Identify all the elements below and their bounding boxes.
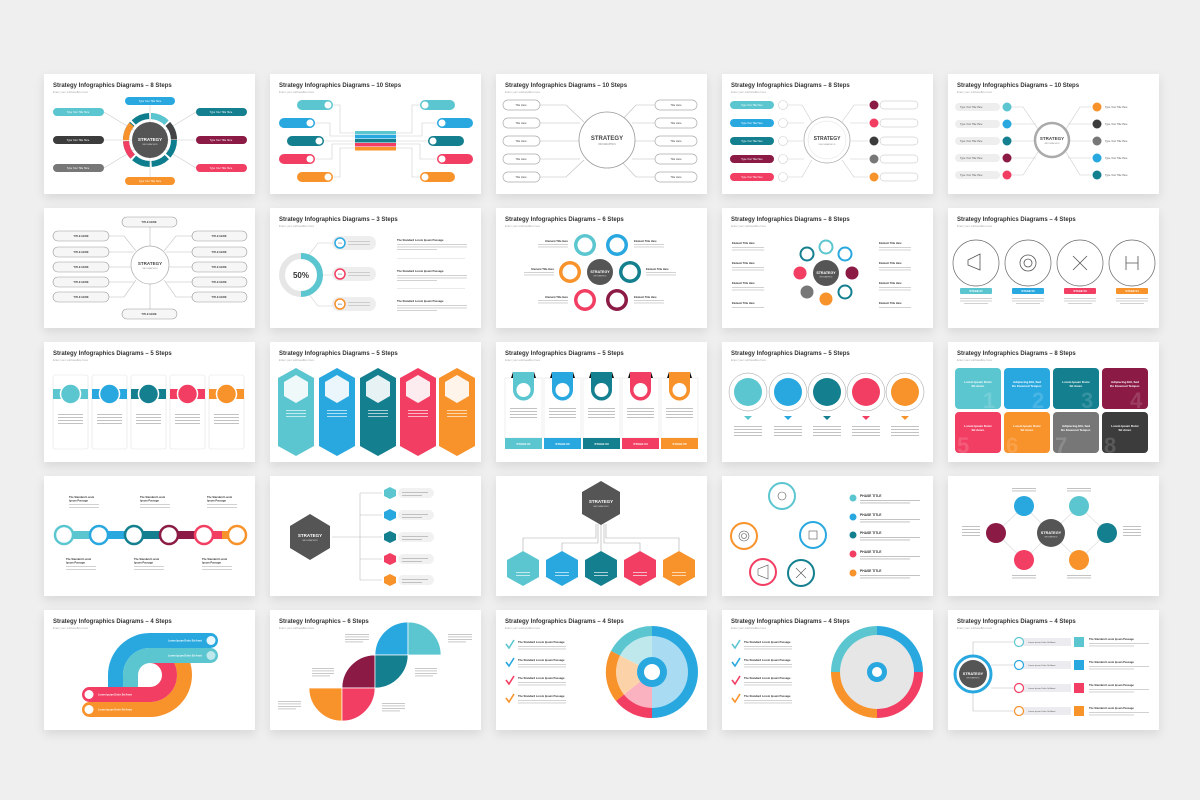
slide: 8 steps radial: INFOGRAPHICS: [142, 143, 158, 146]
slide: 5 steps hex columns: Enter your subheadline here: [279, 358, 315, 362]
slide: S-shape 6 steps: Strategy Infographics – 6 Steps: [279, 619, 369, 625]
slide: 4 steps stages: [948, 208, 1159, 328]
slide: 6 steps petals: [496, 208, 707, 328]
slide: hexagon list: [270, 476, 481, 596]
slide: donut 4 steps A: Enter your subheadline here: [505, 626, 541, 630]
slide: 3 steps 50%: 25%: [338, 274, 342, 276]
slide: 10 steps outline: Title Here: [670, 157, 682, 161]
slide: interlocking U 4 steps: Lorem Ipsum Dolor Sit Amet: [98, 708, 132, 712]
slide: donut 4 steps B: Enter your subheadline here: [731, 626, 767, 630]
slide: title here boxes: TITLE HERE: [73, 234, 89, 238]
slide: 8 steps ring: Element Title Here: [879, 241, 902, 245]
slide: 6 steps petals: Element Title Here: [545, 295, 569, 299]
slide: 6 steps petals: STRATEGY: [590, 270, 610, 274]
slide: 8 steps tiles: Do Eiusmod Tempor.: [1061, 428, 1091, 432]
slide: 8 steps radial: Type Your Title Here: [67, 167, 90, 170]
slide: cross circles: [948, 476, 1159, 596]
slide: 6 steps petals: Element Title Here: [545, 239, 569, 243]
slide: interlocking U 4 steps: [44, 610, 255, 730]
slide: 6 steps petals: Strategy Infographics Diagrams – 6 Steps: [505, 217, 624, 223]
slide: 5 steps stage cards: STAGE 04: [633, 442, 648, 446]
slide: 10 steps icons: Type Your Title Here: [1105, 174, 1128, 177]
slide: 3 steps 50%: The Standard Lorem Ipsum Passage: [397, 269, 444, 273]
slide: 8 steps radial: STRATEGY: [138, 137, 162, 142]
slide: 3 steps 50%: 65%: [338, 304, 342, 306]
slide: 10 steps outline: STRATEGY: [591, 136, 623, 142]
slide: 6 steps petals: Enter your subheadline here: [505, 224, 541, 228]
slide: 10 steps icons: Type Your Title Here: [960, 157, 983, 160]
slide: 8 steps ring: STRATEGY: [816, 271, 836, 275]
slide: list 4 steps: The Standard Lorem Ipsum Passage: [1089, 637, 1134, 641]
slide: 5 steps cards: Enter your subheadline here: [53, 358, 89, 362]
slide: 5 steps cards: Strategy Infographics Diagrams – 5 Steps: [53, 351, 172, 357]
slide: 10 steps icons: Type Your Title Here: [1105, 106, 1128, 109]
slide: title here boxes: [44, 208, 255, 328]
slide: hex tree: INFOGRAPHICS: [593, 505, 609, 508]
slide: 8 steps ring: Element Title Here: [879, 301, 902, 305]
slide: title here boxes: TITLE HERE: [73, 265, 89, 269]
slide: timeline: Ipsum Passage: [134, 560, 153, 564]
slide: timeline: The Standard Lorem: [202, 557, 228, 561]
slide: title here boxes: TITLE HERE: [211, 295, 227, 299]
slide: hexagon list: STRATEGY: [298, 533, 322, 538]
slide: 6 steps petals: Element Title Here: [634, 295, 657, 299]
slide: 3 steps 50%: [270, 208, 481, 328]
slide: interlocking U 4 steps: Lorem Ipsum Dolor Sit Amet: [98, 694, 132, 696]
slide: 8 steps colored pills: Strategy Infographics Diagrams – 8 Steps: [731, 83, 850, 89]
slide: donut 4 steps A: [496, 610, 707, 730]
slide: 8 steps tiles: Lorem Ipsum Dolor: [964, 424, 993, 428]
slide: 8 steps radial: Type Your Title Here: [210, 139, 233, 142]
slide: 8 steps colored pills: Type Your Title Here: [741, 104, 763, 107]
slide: 10 steps outline: Title Here: [670, 103, 682, 107]
slide: 10 steps outline: Title Here: [515, 103, 527, 107]
slide: 10 steps bars: Strategy Infographics Diagrams – 10 Steps: [279, 83, 402, 89]
slide: 5 steps cards: [44, 342, 255, 462]
slide: timeline: Ipsum Passage: [207, 498, 226, 502]
slide: 4 steps stages: STAGE 02: [1021, 289, 1035, 293]
slide: 8 steps radial: Enter your subheadline here: [53, 90, 89, 94]
slide: 8 steps radial: [44, 74, 255, 194]
slide: 3 steps 50%: 75%: [338, 243, 342, 245]
slide: donut 4 steps B: The Standard Lorem Ipsum Passage: [744, 658, 791, 662]
slide: 3 steps 50%: The Standard Lorem Ipsum Passage: [397, 299, 444, 303]
slide: 10 steps icons: INFOGRAPHICS: [1044, 142, 1060, 145]
slide: donut 4 steps A: The Standard Lorem Ipsum Passage: [518, 640, 565, 644]
slide: list 4 steps: Lorem Ipsum Dolor Sit Amet: [1028, 641, 1056, 644]
slide: donut 4 steps B: The Standard Lorem Ipsum Passage: [744, 694, 791, 698]
slide: 8 steps colored pills: [722, 74, 933, 194]
slide: 8 steps tiles: 2: [1032, 388, 1044, 413]
slide: 5 steps circles: [722, 342, 933, 462]
slide: 8 steps tiles: Do Eiusmod Tempor.: [1110, 384, 1140, 388]
slide: 10 steps icons: [948, 74, 1159, 194]
slide: title here boxes: TITLE HERE: [211, 250, 227, 254]
slide: title here boxes: TITLE HERE: [211, 234, 227, 238]
slide: 8 steps tiles: Adipiscing Elit, Sed: [1062, 424, 1090, 428]
slide: donut 4 steps B: Strategy Infographics Diagrams – 4 Steps: [731, 619, 850, 625]
slide: title here boxes: TITLE HERE: [141, 220, 157, 224]
slide: timeline: Ipsum Passage: [202, 560, 221, 564]
slide: 3 steps 50%: Strategy Infographics Diagrams – 3 Steps: [279, 217, 398, 223]
slide: 3 steps 50%: Enter your subheadline here: [279, 224, 315, 228]
slide: 10 steps outline: Title Here: [515, 139, 527, 143]
slide: 10 steps outline: Title Here: [515, 175, 527, 179]
slide: 8 steps tiles: Strategy Infographics Diagrams – 8 Steps: [957, 351, 1076, 357]
slide: 8 steps tiles: Sit Amet.: [1119, 428, 1132, 432]
slide: 10 steps outline: Title Here: [670, 139, 682, 143]
slide: 5 steps stage cards: [496, 342, 707, 462]
slide: donut 4 steps A: The Standard Lorem Ipsum Passage: [518, 694, 565, 698]
slide: 10 steps outline: Enter your subheadline here: [505, 90, 541, 94]
slide: title here boxes: TITLE HERE: [141, 312, 157, 316]
slide: list 4 steps: Lorem Ipsum Dolor Sit Amet: [1028, 687, 1056, 690]
slide: 8 steps ring: INFOGRAPHICS: [820, 276, 833, 278]
slide: title here boxes: TITLE HERE: [73, 295, 89, 299]
slide: 8 steps ring: Element Title Here: [732, 301, 755, 305]
slide: list 4 steps: Strategy Infographics Diagrams – 4 Steps: [957, 619, 1076, 625]
slide: timeline: The Standard Lorem: [140, 495, 166, 499]
slide: list 4 steps: Lorem Ipsum Dolor Sit Amet: [1028, 710, 1056, 713]
slide: 8 steps tiles: 3: [1081, 388, 1093, 413]
slide: 10 steps icons: Type Your Title Here: [1105, 140, 1128, 143]
slide: title here boxes: TITLE HERE: [73, 250, 89, 254]
slide: list 4 steps: The Standard Lorem Ipsum Passage: [1089, 683, 1134, 687]
slide: 8 steps colored pills: Type Your Title Here: [741, 158, 763, 161]
slide: 5 steps stage cards: Strategy Infographics Diagrams – 5 Steps: [505, 351, 624, 357]
slide: list 4 steps: The Standard Lorem Ipsum Passage: [1089, 706, 1134, 710]
slide: donut 4 steps A: Strategy Infographics Diagrams – 4 Steps: [505, 619, 624, 625]
slide: 10 steps icons: Type Your Title Here: [960, 140, 983, 143]
slide: timeline: The Standard Lorem: [207, 495, 233, 499]
slide: 8 steps tiles: Sit Amet.: [972, 428, 985, 432]
slide: 8 steps tiles: Sit Amet.: [1021, 428, 1034, 432]
slide: list 4 steps: STRATEGY: [963, 672, 984, 676]
slide: phase circles: PHASE TITLE: [860, 494, 882, 498]
slide: 10 steps outline: INFOGRAPHICS: [598, 143, 616, 146]
slide: 8 steps radial: Strategy Infographics Diagrams – 8 Steps: [53, 83, 172, 89]
slide: 6 steps petals: Element Title Here: [646, 267, 669, 271]
slide: 10 steps outline: [496, 74, 707, 194]
slide: 8 steps colored pills: Type Your Title Here: [741, 176, 763, 179]
slide: 8 steps colored pills: Type Your Title Here: [741, 122, 763, 125]
slide: donut 4 steps A: The Standard Lorem Ipsum Passage: [518, 676, 565, 680]
slide: donut 4 steps B: [722, 610, 933, 730]
slide: timeline: Ipsum Passage: [69, 498, 88, 502]
slide: 8 steps tiles: 7: [1055, 433, 1067, 458]
slide: 8 steps ring: Element Title Here: [879, 261, 902, 265]
slide: 5 steps circles: Strategy Infographics Diagrams – 5 Steps: [731, 351, 850, 357]
slide: 3 steps 50%: The Standard Lorem Ipsum Passage: [397, 238, 444, 242]
slide: hex tree: STRATEGY: [589, 499, 613, 504]
slide: 10 steps bars: Enter your subheadline here: [279, 90, 315, 94]
slide: 5 steps circles: Enter your subheadline here: [731, 358, 767, 362]
slide: 8 steps tiles: 1: [983, 388, 995, 413]
slide: list 4 steps: Lorem Ipsum Dolor Sit Amet: [1028, 664, 1056, 667]
slide: 10 steps icons: Type Your Title Here: [1105, 157, 1128, 160]
slide: timeline: Ipsum Passage: [140, 498, 159, 502]
slide: 10 steps outline: Title Here: [670, 175, 682, 179]
slide: phase circles: PHASE TITLE: [860, 569, 882, 573]
slide: cross circles: INFOGRAPHICS: [1045, 536, 1058, 538]
slide: 5 steps stage cards: STAGE 03: [594, 442, 609, 446]
slide: phase circles: PHASE TITLE: [860, 531, 882, 535]
slide: 8 steps tiles: 4: [1130, 388, 1143, 413]
slide: 5 steps stage cards: STAGE 05: [672, 442, 687, 446]
slide: 8 steps tiles: 6: [1006, 433, 1018, 458]
slide: 10 steps icons: Enter your subheadline here: [957, 90, 993, 94]
slide: 8 steps tiles: Do Eiusmod Tempor.: [1012, 384, 1042, 388]
slide: interlocking U 4 steps: Lorem Ipsum Dolor Sit Amet: [168, 640, 202, 642]
slide: timeline: The Standard Lorem: [66, 557, 92, 561]
slide: 8 steps radial: Type Your Title Here: [67, 111, 90, 114]
slide: 10 steps icons: STRATEGY: [1040, 136, 1064, 141]
slide: title here boxes: TITLE HERE: [211, 265, 227, 269]
slide: 5 steps stage cards: STAGE 01: [516, 442, 531, 446]
slide: 10 steps icons: Type Your Title Here: [960, 106, 983, 109]
slide: timeline: Ipsum Passage: [66, 560, 85, 564]
slide: 8 steps tiles: Adipiscing Elit, Sed: [1111, 380, 1139, 384]
slide: 10 steps icons: Type Your Title Here: [960, 174, 983, 177]
slide: 5 steps hex columns: Strategy Infographics Diagrams – 5 Steps: [279, 351, 398, 357]
slide: interlocking U 4 steps: Lorem Ipsum Dolor Sit Amet: [168, 654, 202, 658]
slide: title here boxes: TITLE HERE: [211, 280, 227, 284]
slide: S-shape 6 steps: [270, 610, 481, 730]
slide: 10 steps outline: Strategy Infographics Diagrams – 10 Steps: [505, 83, 628, 89]
slide: 8 steps colored pills: Type Your Title Here: [741, 140, 763, 143]
slide: phase circles: PHASE TITLE: [860, 550, 882, 554]
slide: 8 steps tiles: Lorem Ipsum Dolor: [1062, 380, 1091, 384]
slide: 8 steps colored pills: Enter your subheadline here: [731, 90, 767, 94]
slide: 5 steps hex columns: [270, 342, 481, 462]
slide: interlocking U 4 steps: Enter your subheadline here: [53, 626, 89, 630]
slide: 8 steps tiles: Enter your subheadline here: [957, 358, 993, 362]
slide: 10 steps icons: Strategy Infographics Diagrams – 10 Steps: [957, 83, 1080, 89]
slide: cross circles: STRATEGY: [1041, 531, 1062, 535]
slide: 10 steps icons: Type Your Title Here: [960, 123, 983, 126]
slide: 4 steps stages: STAGE 04: [1125, 289, 1139, 293]
slide: list 4 steps: INFOGRAPHICS: [967, 676, 980, 680]
slide: 4 steps stages: Enter your subheadline here: [957, 224, 993, 228]
slide: donut 4 steps A: The Standard Lorem Ipsum Passage: [518, 658, 565, 662]
slide: list 4 steps: The Standard Lorem Ipsum Passage: [1089, 660, 1134, 664]
slide: 8 steps tiles: Sit Amet.: [1070, 384, 1083, 388]
slide: 5 steps stage cards: Enter your subheadline here: [505, 358, 541, 362]
slide: S-shape 6 steps: Enter your subheadline here: [279, 626, 315, 630]
slide: hex tree: [496, 476, 707, 596]
slide: 10 steps outline: Title Here: [670, 121, 682, 125]
slide: 10 steps outline: Title Here: [515, 157, 527, 161]
slide: 8 steps tiles: Adipiscing Elit, Sed: [1013, 380, 1041, 384]
slide: donut 4 steps B: The Standard Lorem Ipsum Passage: [744, 640, 791, 644]
slide: 8 steps ring: Element Title Here: [732, 241, 755, 245]
slide: title here boxes: INFOGRAPHICS: [142, 267, 158, 270]
slide: 8 steps radial: Type Your Title Here: [67, 139, 90, 142]
slide: list 4 steps: [948, 610, 1159, 730]
slide: 8 steps ring: [722, 208, 933, 328]
slide: 5 steps stage cards: STAGE 02: [555, 442, 570, 446]
slide: 10 steps bars: [270, 74, 481, 194]
slide: 8 steps tiles: Lorem Ipsum Dolor: [1013, 424, 1042, 428]
slide: 8 steps tiles: 5: [957, 433, 969, 458]
slide: 8 steps radial: Type Your Title Here: [139, 180, 162, 183]
slide: 8 steps colored pills: STRATEGY: [814, 136, 841, 142]
slide: 8 steps ring: Element Title Here: [879, 281, 902, 285]
slide: hexagon list: INFOGRAPHICS: [302, 539, 318, 542]
slide: timeline: [44, 476, 255, 596]
slide: 4 steps stages: STAGE 01: [969, 289, 983, 293]
slide: timeline: The Standard Lorem: [69, 495, 95, 499]
slide: 8 steps ring: Element Title Here: [732, 261, 755, 265]
slide: 8 steps ring: Strategy Infographics Diagrams – 8 Steps: [731, 217, 850, 223]
slide: 8 steps tiles: [948, 342, 1159, 462]
slide: title here boxes: STRATEGY: [138, 261, 162, 266]
slide: timeline: The Standard Lorem: [134, 557, 160, 561]
slide: 10 steps outline: Title Here: [515, 121, 527, 125]
slide: 4 steps stages: Strategy Infographics Diagrams – 4 Steps: [957, 217, 1076, 223]
slide: 6 steps petals: INFOGRAPHICS: [594, 274, 607, 278]
slide: 8 steps colored pills: INFOGRAPHICS: [819, 143, 836, 146]
slide: phase circles: PHASE TITLE: [860, 513, 882, 517]
slide: 3 steps 50%: 50%: [293, 271, 309, 280]
slide: 8 steps radial: Type Your Title Here: [210, 111, 233, 114]
slide: 6 steps petals: Element Title Here: [634, 239, 657, 243]
slide: 8 steps tiles: Lorem Ipsum Dolor: [1111, 424, 1140, 428]
slide: 6 steps petals: Element Title Here: [531, 267, 555, 271]
slide: 8 steps ring: Enter your subheadline here: [731, 224, 767, 228]
slide: 8 steps tiles: 8: [1104, 433, 1116, 458]
slide: 8 steps radial: Type Your Title Here: [139, 100, 162, 103]
slide: 4 steps stages: STAGE 03: [1073, 289, 1087, 293]
slide: phase circles: [722, 476, 933, 596]
slide: 8 steps radial: Type Your Title Here: [210, 167, 233, 170]
slide: 10 steps icons: Type Your Title Here: [1105, 123, 1128, 126]
slide: list 4 steps: Enter your subheadline here: [957, 626, 993, 630]
slide: 8 steps tiles: Lorem Ipsum Dolor: [964, 380, 993, 384]
slide: interlocking U 4 steps: Strategy Infographics Diagrams – 4 Steps: [53, 619, 172, 625]
slide: 8 steps ring: Element Title Here: [732, 281, 755, 285]
slide: donut 4 steps B: The Standard Lorem Ipsum Passage: [744, 676, 791, 680]
slide: 8 steps tiles: Sit Amet.: [972, 384, 985, 388]
slide: title here boxes: TITLE HERE: [73, 280, 89, 284]
